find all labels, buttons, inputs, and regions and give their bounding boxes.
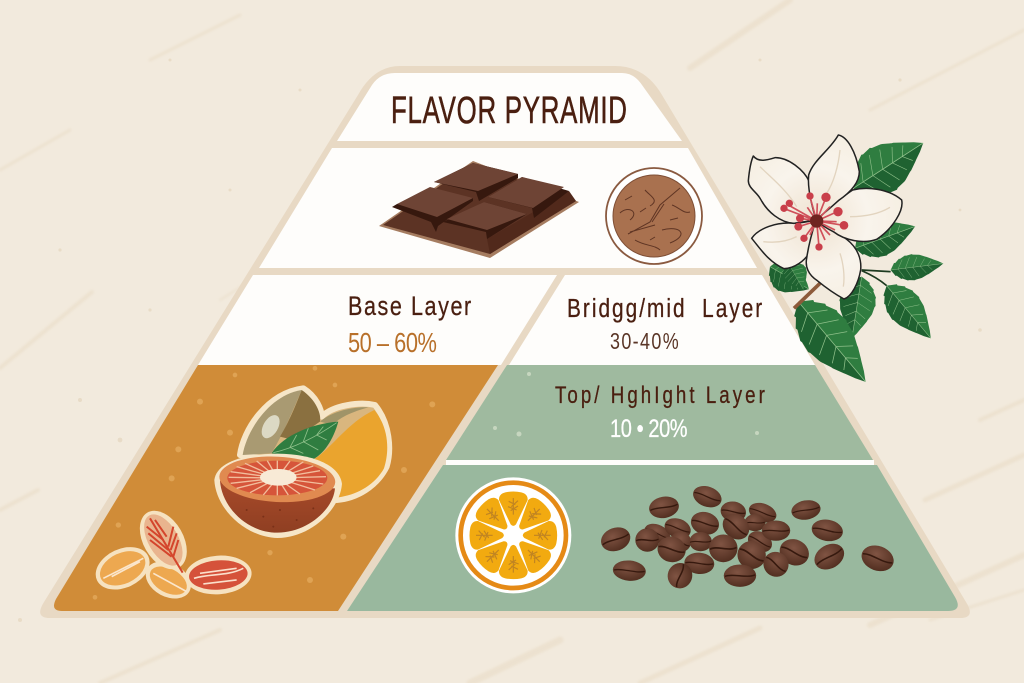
panel: bridge layer label [509, 275, 815, 365]
panel: bottom green layer [347, 460, 958, 611]
heading: top highlight layer: Top/ HghIght Layer [555, 382, 765, 409]
petals [748, 135, 902, 299]
percent: bridge layer: 30-40% [610, 329, 679, 355]
leaves [762, 122, 945, 398]
heading: base layer: Base Layer [348, 292, 471, 322]
panel: title [337, 73, 682, 141]
panel: top highlight layer [446, 365, 873, 460]
icon: coffee beans [598, 482, 897, 592]
stamens [780, 192, 848, 251]
icon: fruits [214, 388, 389, 538]
icon: flower with leaves [748, 134, 944, 382]
icon: cocoa disc [606, 168, 702, 264]
icon: orange slice [455, 477, 571, 593]
panel: chocolate layer [259, 148, 757, 268]
panel: orange base layer [54, 365, 498, 611]
pyramid frame [40, 66, 970, 618]
icon: almonds [89, 503, 253, 606]
percent: base layer: 50 – 60% [348, 327, 437, 359]
divider [446, 460, 874, 465]
speckles [93, 366, 435, 600]
icon: chocolate bar [379, 161, 579, 258]
speckles [493, 372, 759, 436]
heading: bridge layer: Bridgg/mid Layer [567, 294, 762, 323]
percent: top highlight layer: 10 • 20% [610, 415, 688, 443]
title: FLAVOR PYRAMID [391, 89, 627, 131]
panel: base layer label [198, 275, 557, 365]
petal shading [760, 150, 890, 287]
